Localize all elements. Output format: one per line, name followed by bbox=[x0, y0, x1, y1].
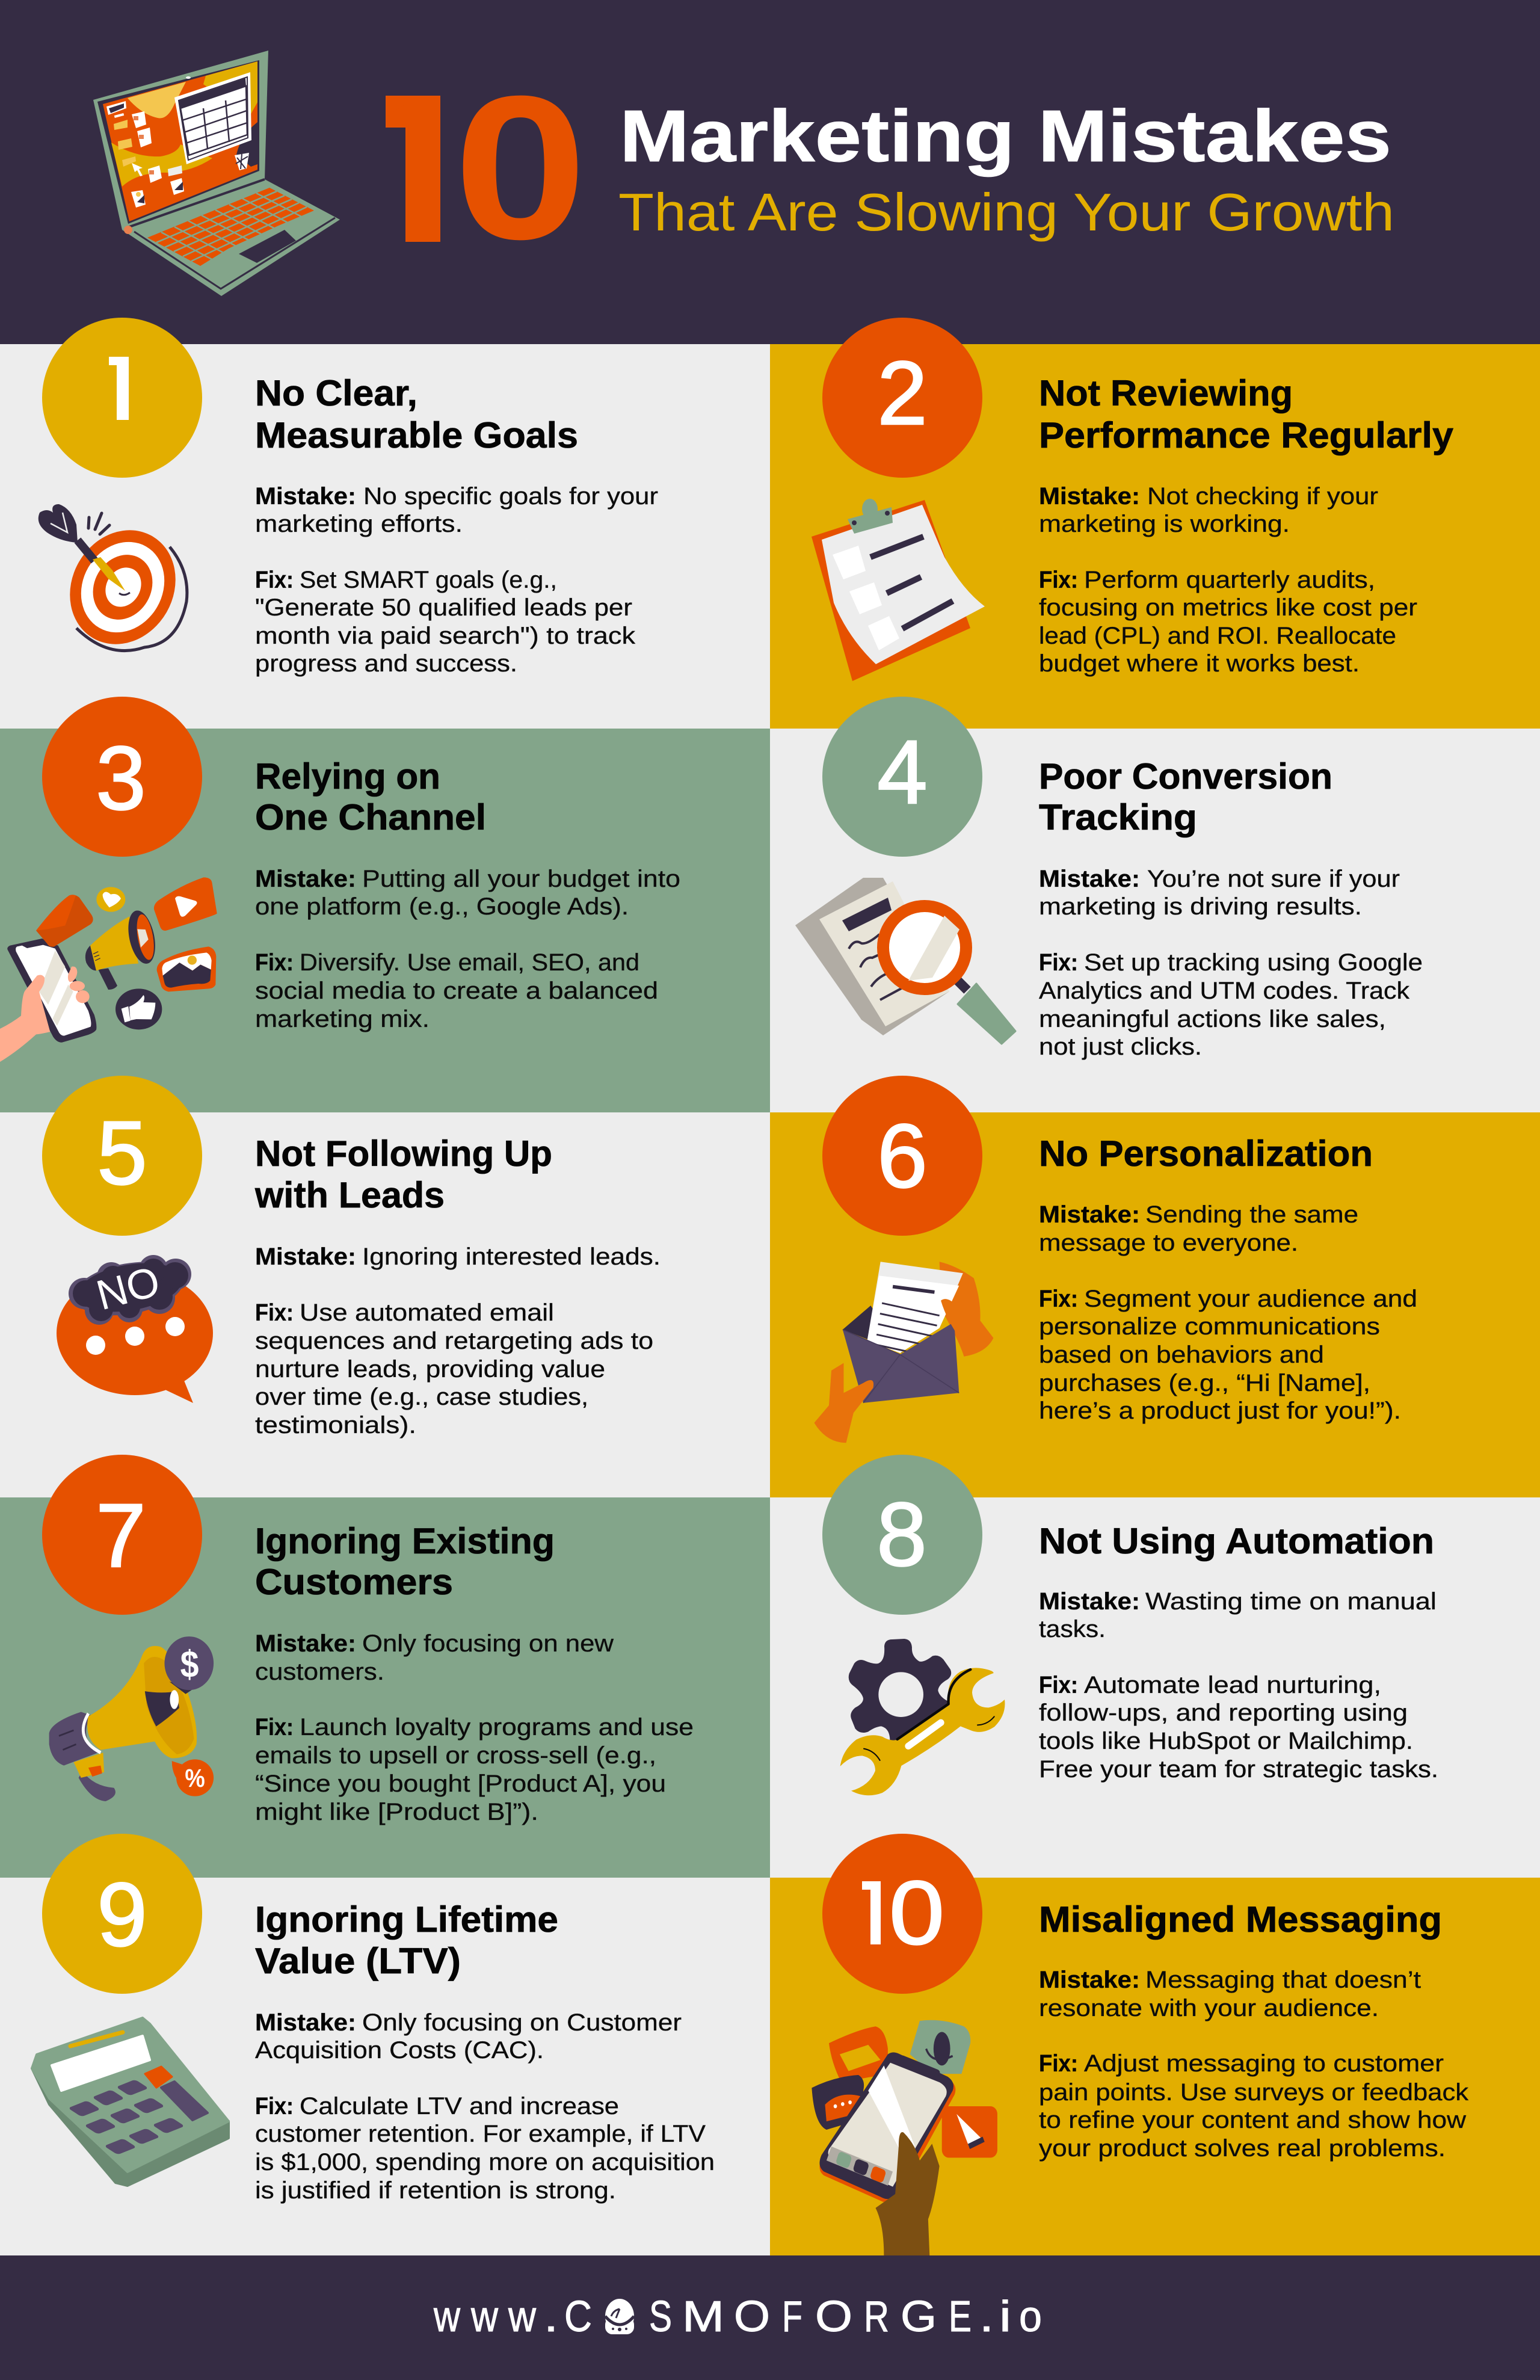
text 3: one platform (e.g., Google Ads). bbox=[255, 893, 629, 920]
text 9: is $1,000, spending more on acquisition bbox=[255, 2149, 715, 2175]
footer url: w bbox=[433, 2293, 461, 2341]
heading 4: Tracking bbox=[1039, 797, 1197, 837]
icon: speech bubble with NO cloud bbox=[57, 1254, 213, 1403]
text 6: Fix: bbox=[1039, 1286, 1078, 1312]
text 6: Mistake: bbox=[1039, 1201, 1140, 1228]
text 10: to refine your content and show how bbox=[1039, 2107, 1466, 2133]
number badge 5 bbox=[42, 1076, 202, 1236]
heading 1 bbox=[255, 373, 578, 455]
text 7: customers. bbox=[255, 1659, 384, 1685]
heading 10: Misaligned Messaging bbox=[1039, 1899, 1442, 1940]
text 1: month via paid search") to track bbox=[255, 623, 636, 649]
text 8: Mistake: bbox=[1039, 1588, 1140, 1615]
text 10: resonate with your audience. bbox=[1039, 1995, 1379, 2021]
icon: phone in hand with app tiles bbox=[812, 2020, 997, 2255]
text 1: Fix: bbox=[255, 567, 294, 593]
number badge 4: 4 bbox=[877, 721, 928, 822]
text 8: Wasting time on manual bbox=[1145, 1588, 1437, 1615]
text 8: Free your team for strategic tasks. bbox=[1039, 1756, 1438, 1783]
icon: megaphone with dollar and percent: % bbox=[185, 1764, 205, 1792]
text 9: customer retention. For example, if LTV bbox=[255, 2121, 706, 2147]
footer url: S bbox=[649, 2293, 672, 2341]
text 5: Use automated email bbox=[300, 1299, 554, 1326]
text 5 bbox=[255, 1244, 661, 1438]
text 10: pain points. Use surveys or feedback bbox=[1039, 2079, 1469, 2106]
logo mark bbox=[605, 2299, 634, 2334]
heading 5 bbox=[254, 1133, 552, 1215]
text 8 bbox=[1039, 1588, 1438, 1783]
text 9: Calculate LTV and increase bbox=[300, 2093, 619, 2119]
text 8: Automate lead nurturing, bbox=[1084, 1672, 1381, 1698]
text 1: marketing efforts. bbox=[255, 511, 463, 537]
text 4: Analytics and UTM codes. Track bbox=[1039, 978, 1410, 1004]
text 7: Fix: bbox=[255, 1714, 294, 1740]
text 6: Sending the same bbox=[1145, 1201, 1358, 1228]
text 5: Mistake: bbox=[255, 1244, 356, 1270]
footer url: G bbox=[901, 2293, 937, 2341]
number badge 2: 2 bbox=[877, 342, 928, 443]
text 9: is justified if retention is strong. bbox=[255, 2177, 616, 2204]
text 4: You’re not sure if your bbox=[1147, 866, 1400, 892]
text 7: Mistake: bbox=[255, 1630, 356, 1657]
panel 4: poor conversion tracking bbox=[770, 697, 1540, 1112]
number badge 1: 1 bbox=[96, 338, 146, 439]
number badge 4 bbox=[822, 697, 982, 857]
text 1: "Generate 50 qualified leads per bbox=[255, 594, 632, 621]
text 10: Adjust messaging to customer bbox=[1084, 2050, 1444, 2077]
number badge 3 bbox=[42, 697, 202, 857]
text 2: focusing on metrics like cost per bbox=[1039, 594, 1417, 621]
panel 3: relying on one channel bbox=[0, 697, 770, 1112]
icon: speech bubble with NO cloud: NO bbox=[91, 1257, 165, 1319]
text 6: based on behaviors and bbox=[1039, 1342, 1324, 1368]
text 3: Putting all your budget into bbox=[362, 866, 680, 892]
heading 3: Relying on bbox=[255, 756, 440, 797]
panel 8: not using automation bbox=[770, 1455, 1540, 1878]
text 8: follow-ups, and reporting using bbox=[1039, 1700, 1408, 1726]
number badge 7: 7 bbox=[96, 1485, 146, 1586]
heading 2: Not Reviewing bbox=[1039, 373, 1293, 413]
number badge 10: 0 bbox=[889, 1862, 944, 1963]
text 5: Ignoring interested leads. bbox=[362, 1244, 661, 1270]
heading 5: Not Following Up bbox=[255, 1133, 552, 1174]
text 6: Segment your audience and bbox=[1084, 1286, 1417, 1312]
text 8: tools like HubSpot or Mailchimp. bbox=[1039, 1728, 1413, 1754]
title: Marketing Mistakes: Marketing Mistakes bbox=[620, 95, 1391, 177]
footer url: . bbox=[979, 2293, 994, 2341]
text 6: message to everyone. bbox=[1039, 1230, 1298, 1256]
text 5: over time (e.g., case studies, bbox=[255, 1384, 588, 1410]
icon: phone, megaphone and social media bbox=[0, 877, 217, 1062]
text 6: here’s a product just for you!”). bbox=[1039, 1398, 1401, 1424]
icon: magnifier over documents bbox=[795, 878, 1015, 1044]
panel 6: no personalization bbox=[770, 1076, 1540, 1497]
number badge 9 bbox=[42, 1834, 202, 1994]
text 4: Fix: bbox=[1039, 949, 1078, 976]
footer url: . bbox=[544, 2293, 558, 2341]
text 4 bbox=[1039, 866, 1423, 1060]
text 9: Fix: bbox=[255, 2093, 294, 2119]
text 10: Mistake: bbox=[1039, 1967, 1140, 1993]
footer url: O bbox=[734, 2293, 770, 2341]
text 2: Mistake: bbox=[1039, 483, 1140, 510]
icon: megaphone with dollar and percent: $ bbox=[180, 1643, 199, 1686]
text 2 bbox=[1039, 483, 1417, 677]
text 1 bbox=[255, 483, 658, 677]
heading 6: No Personalization bbox=[1039, 1133, 1373, 1174]
text 10: your product solves real problems. bbox=[1039, 2135, 1446, 2162]
text 3: social media to create a balanced bbox=[255, 978, 658, 1004]
heading 9 bbox=[255, 1899, 558, 1981]
number badge 10: 1 bbox=[848, 1863, 898, 1964]
text 4: not just clicks. bbox=[1039, 1034, 1202, 1060]
text 1: Mistake: bbox=[255, 483, 356, 510]
text 8: Fix: bbox=[1039, 1672, 1078, 1698]
text 4: Set up tracking using Google bbox=[1084, 949, 1423, 976]
footer band bbox=[0, 2255, 1540, 2380]
title number 10 bbox=[386, 95, 578, 242]
text 4: meaningful actions like sales, bbox=[1039, 1006, 1386, 1032]
number badge 8 bbox=[822, 1455, 982, 1615]
footer url: i bbox=[999, 2293, 1011, 2341]
text 10: Messaging that doesn’t bbox=[1145, 1967, 1421, 1993]
heading 9: Ignoring Lifetime bbox=[255, 1899, 558, 1940]
footer url bbox=[433, 2293, 1042, 2341]
icon: calculator bbox=[32, 2018, 229, 2186]
icon: laptop bbox=[93, 51, 340, 296]
heading 4: Poor Conversion bbox=[1039, 756, 1332, 797]
heading 7: Customers bbox=[255, 1562, 453, 1602]
number badge 2 bbox=[822, 318, 982, 478]
text 2: Not checking if your bbox=[1147, 483, 1378, 510]
text 5: Fix: bbox=[255, 1299, 294, 1326]
text 2: Fix: bbox=[1039, 567, 1078, 593]
number badge 6: 6 bbox=[877, 1105, 928, 1206]
text 5: nurture leads, providing value bbox=[255, 1356, 605, 1383]
panel 1: no clear goals bbox=[0, 318, 770, 729]
subtitle: That Are Slowing Your Growth bbox=[618, 182, 1394, 242]
text 1: progress and success. bbox=[255, 650, 517, 677]
panel 10: misaligned messaging bbox=[770, 1834, 1540, 2255]
text 3: Diversify. Use email, SEO, and bbox=[300, 949, 639, 976]
heading 4 bbox=[1039, 756, 1332, 837]
text 3: marketing mix. bbox=[255, 1006, 430, 1032]
panel 5: not following up bbox=[0, 1076, 770, 1497]
text 8: tasks. bbox=[1039, 1616, 1106, 1642]
footer url: O bbox=[815, 2293, 852, 2341]
panel 2: not reviewing performance bbox=[770, 318, 1540, 729]
text 7: emails to upsell or cross-sell (e.g., bbox=[255, 1742, 656, 1769]
text 7 bbox=[255, 1630, 694, 1825]
text 2: budget where it works best. bbox=[1039, 650, 1360, 677]
text 6: purchases (e.g., “Hi [Name], bbox=[1039, 1370, 1370, 1396]
heading 7: Ignoring Existing bbox=[255, 1521, 555, 1561]
footer url: C bbox=[564, 2293, 592, 2341]
text 10 bbox=[1039, 1967, 1469, 2162]
heading 9: Value (LTV) bbox=[255, 1941, 461, 1981]
heading 3: One Channel bbox=[255, 797, 486, 837]
text 2: marketing is working. bbox=[1039, 511, 1290, 537]
number badge 5: 5 bbox=[97, 1102, 147, 1203]
number badge 8: 8 bbox=[876, 1484, 927, 1585]
icon: megaphone with dollar and percent bbox=[49, 1636, 214, 1801]
heading 2 bbox=[1039, 373, 1454, 455]
number badge 1 bbox=[42, 318, 202, 478]
text 9: Mistake: bbox=[255, 2009, 356, 2036]
number badge 10 bbox=[822, 1834, 982, 1994]
text 6: personalize communications bbox=[1039, 1313, 1380, 1340]
text 1: Set SMART goals (e.g., bbox=[300, 567, 557, 593]
text 10: Fix: bbox=[1039, 2050, 1078, 2077]
heading 1: Measurable Goals bbox=[255, 415, 578, 455]
panel 9: ignoring lifetime value bbox=[0, 1834, 770, 2255]
text 7: might like [Product B]”). bbox=[255, 1799, 538, 1825]
number badge 7 bbox=[42, 1455, 202, 1615]
text 7: Only focusing on new bbox=[362, 1630, 614, 1657]
text 2: lead (CPL) and ROI. Reallocate bbox=[1039, 623, 1396, 649]
text 6 bbox=[1039, 1201, 1417, 1424]
text 7: Launch loyalty programs and use bbox=[300, 1714, 694, 1740]
title number 10: 0 bbox=[454, 54, 587, 282]
heading 2: Performance Regularly bbox=[1039, 415, 1454, 455]
icon: clipboard bbox=[812, 499, 985, 681]
number badge 6 bbox=[822, 1076, 982, 1236]
footer url: E bbox=[949, 2293, 972, 2341]
title number 10: 1 bbox=[361, 57, 475, 286]
footer url: R bbox=[864, 2293, 889, 2341]
text 7: “Since you bought [Product A], you bbox=[255, 1771, 666, 1797]
footer url: F bbox=[782, 2293, 802, 2341]
text 5: sequences and retargeting ads to bbox=[255, 1328, 653, 1354]
footer url: w bbox=[470, 2293, 499, 2341]
text 3: Mistake: bbox=[255, 866, 356, 892]
footer url: w bbox=[508, 2293, 537, 2341]
icon: target and dart bbox=[38, 504, 196, 664]
footer url: o bbox=[1019, 2293, 1042, 2341]
header band bbox=[0, 0, 1540, 344]
text 5: testimonials). bbox=[255, 1412, 416, 1438]
heading 1: No Clear, bbox=[255, 373, 417, 413]
text 3 bbox=[255, 866, 680, 1032]
text 2: Perform quarterly audits, bbox=[1084, 567, 1375, 593]
text 9: Only focusing on Customer bbox=[362, 2009, 682, 2036]
text 1: No specific goals for your bbox=[363, 483, 658, 510]
text 9: Acquisition Costs (CAC). bbox=[255, 2037, 544, 2064]
text 3: Fix: bbox=[255, 949, 294, 976]
heading 5: with Leads bbox=[254, 1175, 445, 1215]
number badge 9: 9 bbox=[97, 1864, 147, 1965]
text 4: Mistake: bbox=[1039, 866, 1140, 892]
text 4: marketing is driving results. bbox=[1039, 893, 1362, 920]
heading 7 bbox=[255, 1521, 555, 1602]
number badge 3: 3 bbox=[96, 727, 146, 828]
footer url: M bbox=[682, 2293, 724, 2341]
icon: gear and wrench bbox=[840, 1639, 1005, 1795]
text 9 bbox=[255, 2009, 715, 2204]
heading 3 bbox=[255, 756, 486, 837]
panel 7: ignoring existing customers bbox=[0, 1455, 770, 1878]
icon: envelope and letter with hands bbox=[814, 1262, 993, 1443]
heading 8: Not Using Automation bbox=[1039, 1521, 1434, 1561]
